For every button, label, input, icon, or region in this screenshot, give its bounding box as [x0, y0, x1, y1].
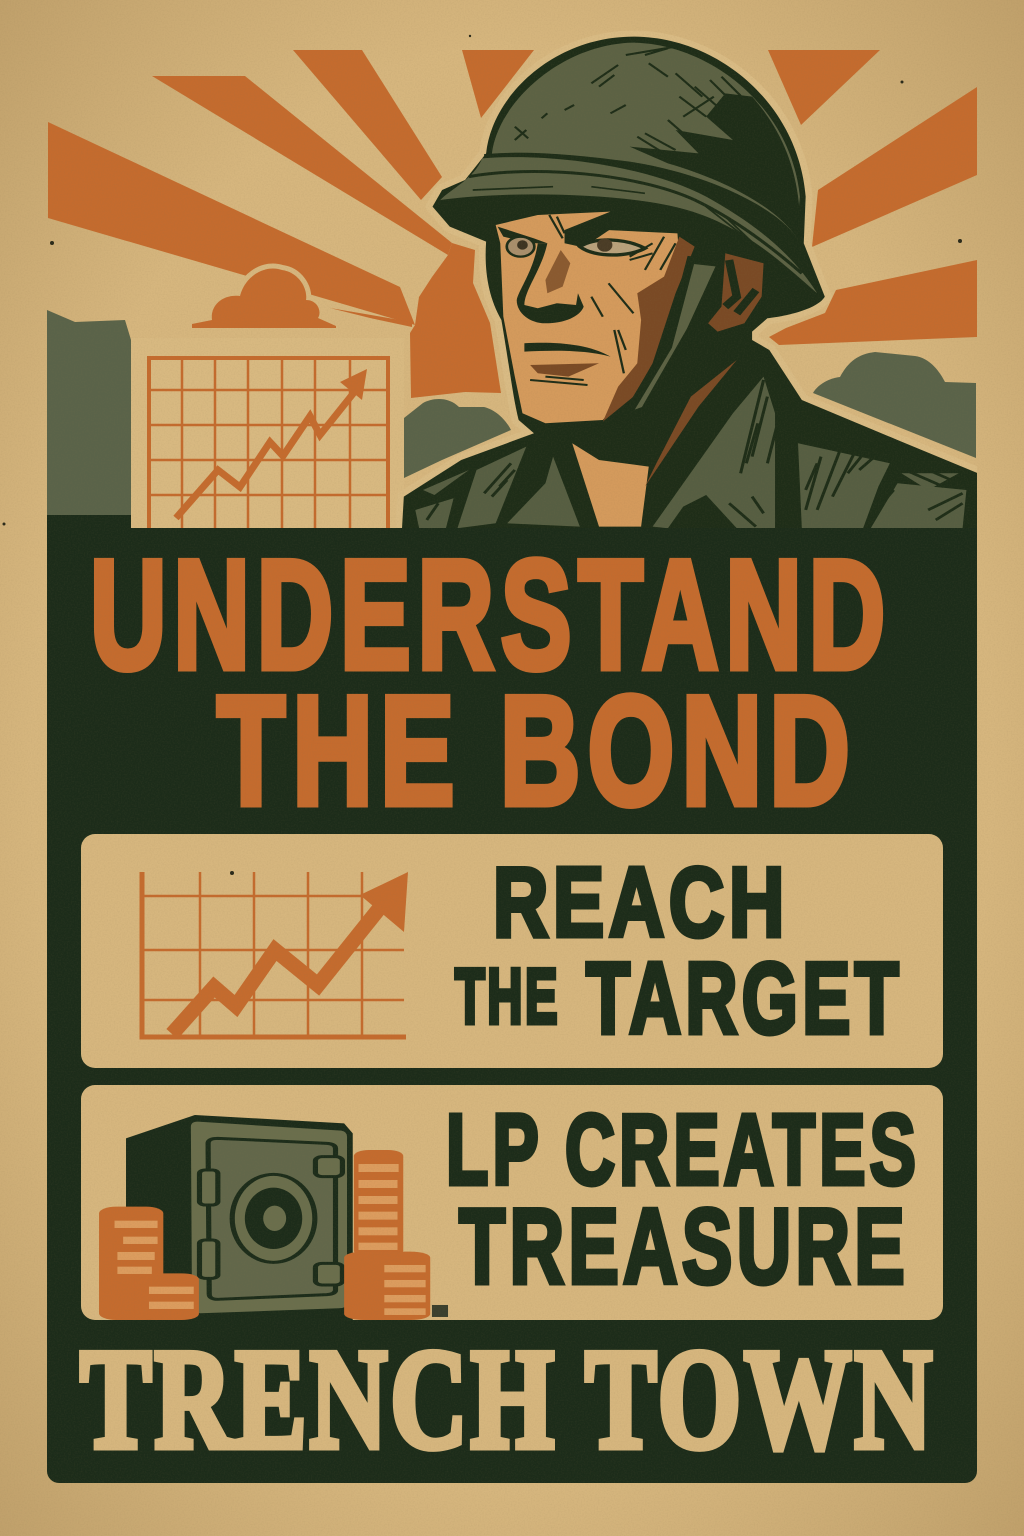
face shadow — [603, 237, 695, 422]
heading: reach the target — [455, 847, 903, 1055]
left hill — [47, 310, 131, 520]
right hill — [813, 352, 976, 458]
nose shadow — [545, 250, 570, 293]
ear — [708, 253, 764, 332]
helmet brim — [440, 157, 817, 293]
eye right — [580, 240, 645, 255]
helmet dome — [492, 43, 800, 237]
helmet shadow — [630, 93, 800, 237]
soldier halo and silhouette — [402, 37, 978, 530]
coin highlights — [115, 1164, 426, 1315]
panel: lp creates treasure — [81, 1085, 943, 1320]
neck — [572, 443, 649, 527]
mouth — [524, 343, 610, 357]
heading: reach the target: REACH — [493, 847, 789, 957]
dark lower panel — [47, 515, 977, 1483]
sunburst rays — [48, 50, 977, 398]
nose line — [517, 243, 584, 323]
heading: reach the target: THE — [455, 952, 560, 1040]
helmet hatching — [515, 47, 748, 153]
jacket hatching — [427, 380, 963, 527]
face — [496, 212, 679, 423]
panel: reach the target — [81, 834, 943, 1068]
middle hill — [404, 399, 511, 478]
icon: safe and coins — [99, 1115, 448, 1320]
heading: reach the target: TARGET — [586, 943, 903, 1055]
safe dial — [232, 1174, 315, 1262]
brim band line — [469, 172, 802, 273]
coin stacks — [99, 1150, 430, 1320]
safe body — [126, 1115, 353, 1320]
small rising chart in the scene — [131, 338, 404, 533]
face wrinkles — [549, 215, 676, 373]
soldier illustration — [402, 37, 978, 530]
chin strap — [632, 256, 716, 410]
icon: rising chart — [142, 872, 408, 1037]
title — [90, 528, 892, 837]
cloud — [192, 268, 336, 328]
brow and eyes — [498, 227, 614, 247]
jacket patches — [415, 377, 966, 528]
safe door — [191, 1122, 347, 1313]
paper specks — [2, 35, 962, 875]
heading: lp creates treasure — [446, 1094, 920, 1306]
safe hinges — [199, 1157, 342, 1285]
eye left — [507, 237, 534, 257]
